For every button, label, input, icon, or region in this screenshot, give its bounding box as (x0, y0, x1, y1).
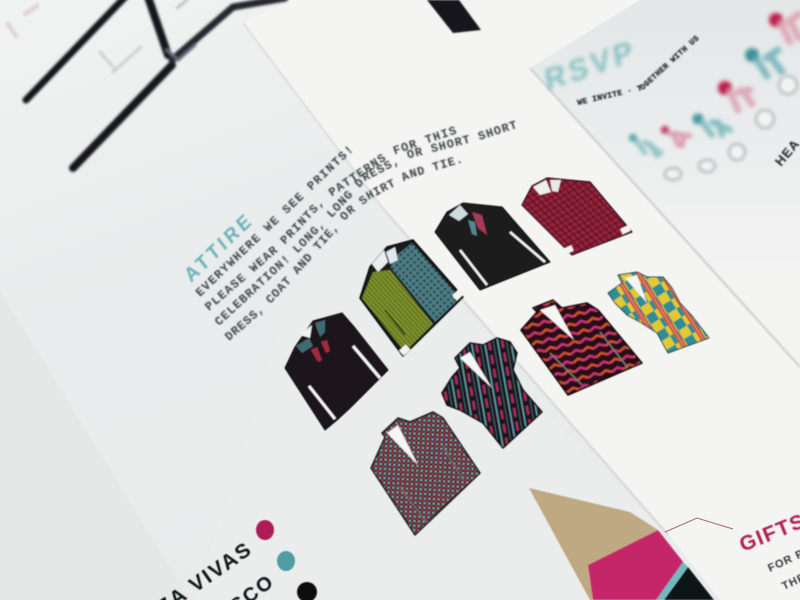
text block: attire description: EVERYWHERE WE SEE PRINTS! (194, 146, 352, 298)
icon: dotted jacket (371, 412, 480, 535)
panel: central folded sheet (195, 0, 800, 600)
icon: wave pattern jacket (521, 300, 642, 395)
icon row: RSVP rings (665, 76, 797, 180)
heading: RSVP: RSVP (542, 34, 639, 98)
illustration: kraft envelope (529, 488, 714, 600)
text block: attire description: CELEBRATION! LONG, LONG DRESS, OR SHORT SHORT (214, 120, 516, 326)
legend item: pink name (139, 520, 274, 600)
icon: green and teal shirt (360, 240, 463, 356)
text: RSVP subline: WE INVITE · TOGETHER WITH US (576, 34, 700, 106)
legend item: black dot (297, 582, 317, 600)
heading: ATTIRE: ATTIRE (181, 209, 258, 287)
icon: figure teal 2 (692, 114, 730, 135)
panel: RSVP sheet (530, 0, 800, 367)
icon: red plaid shirt (522, 178, 632, 255)
legend: names with dots (139, 520, 317, 600)
connector line to gifts (665, 518, 733, 532)
icon: figure pink 1 (661, 126, 690, 146)
icon: figure pink 2 (718, 81, 752, 110)
legend item: teal name (226, 551, 295, 600)
icon: plaid vest (608, 272, 709, 353)
icon: figure teal 1 (629, 134, 661, 156)
text block: attire description: DRESS, COAT AND TIE, OR SHIRT AND TIE. (224, 156, 462, 342)
icon: striped vest (442, 338, 542, 448)
top black route lines (8, 0, 285, 168)
icon row: RSVP figures (629, 13, 799, 156)
icon: figure teal 3 (745, 48, 782, 76)
icon: figure pink 3 (769, 13, 799, 42)
icon: black shirt top row (435, 203, 550, 290)
text block: attire description: PLEASE WEAR PRINTS, PATTERNS FOR THIS (204, 126, 458, 312)
icon: black shirt with red tie (285, 313, 388, 430)
black corner shape top (427, 0, 481, 33)
text: gifts body (766, 548, 800, 593)
